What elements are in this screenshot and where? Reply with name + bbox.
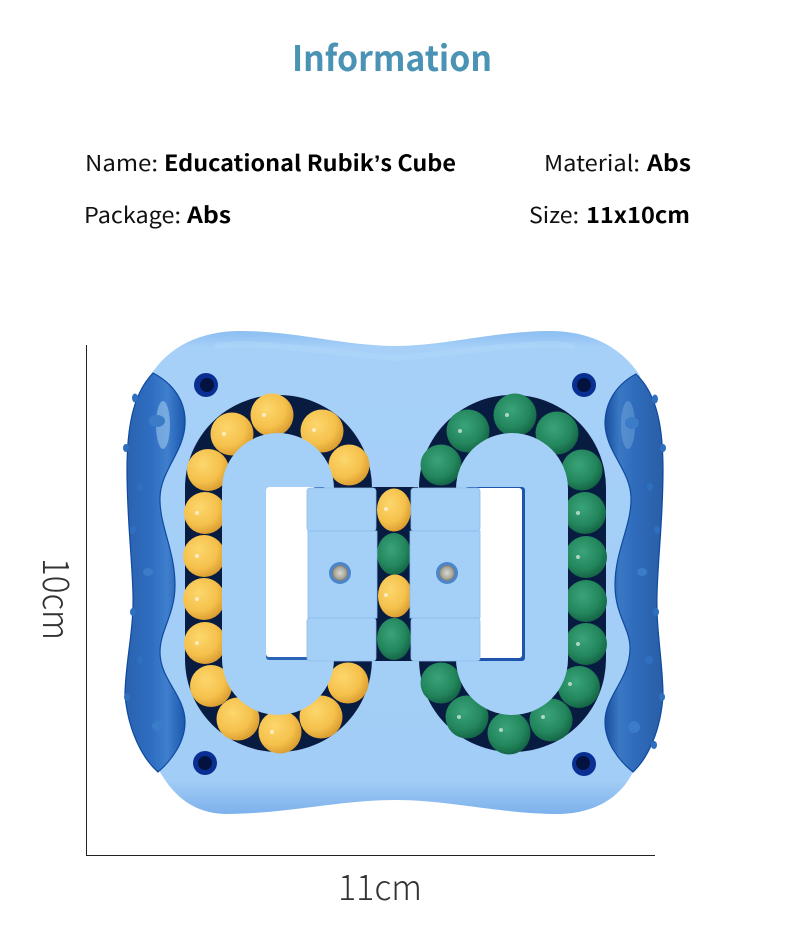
right inner island (456, 433, 568, 715)
spec: size (529, 198, 690, 230)
right grip (605, 374, 666, 772)
spec: material: Abs (646, 146, 691, 178)
centre channel (372, 487, 418, 661)
right ball track (419, 395, 606, 752)
spec: size: 11x10cm (586, 198, 690, 230)
title: Information (292, 31, 492, 82)
spec: package (84, 198, 231, 230)
dimension axes (86, 345, 655, 856)
spec: package: Package: (84, 198, 181, 230)
screws (329, 562, 458, 584)
right window (465, 487, 525, 661)
green balls (420, 394, 607, 754)
corner holes (193, 373, 596, 776)
spec: size: Size: (529, 198, 579, 230)
toy body (150, 331, 640, 814)
left slider blocks (307, 488, 377, 661)
spec: material: Material: (544, 146, 640, 178)
spec: name: Educational Rubik ’s Cube (164, 146, 456, 178)
spec: package: Abs (186, 198, 231, 230)
yellow balls (183, 394, 370, 754)
left inner island (222, 433, 334, 715)
centre balls (377, 488, 412, 660)
left window (266, 487, 326, 660)
top highlight (215, 344, 575, 358)
width label: 11cm (338, 860, 422, 911)
height label: 10cm (32, 558, 86, 640)
toy illustration (123, 331, 666, 814)
spec: material (544, 146, 691, 178)
spec: name: Name: (85, 146, 158, 178)
left ball track (185, 395, 372, 752)
right slider blocks (410, 488, 480, 661)
left grip (123, 373, 185, 772)
ball highlights (195, 413, 580, 734)
